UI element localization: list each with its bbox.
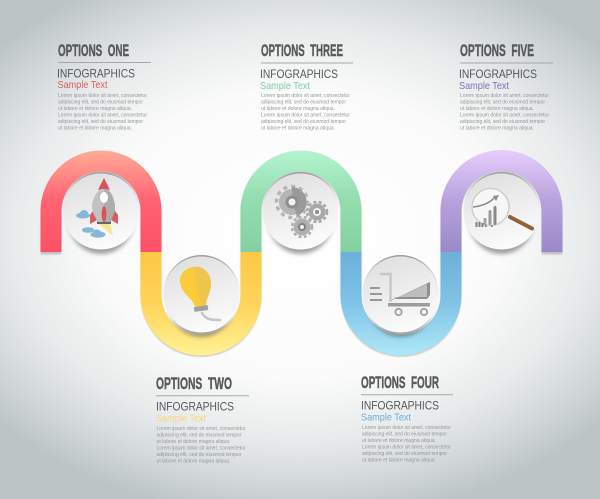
label: infographics: INFOGRAPHICS — [156, 400, 234, 414]
body copy — [156, 426, 246, 464]
body copy: ut labore et dolore magna aliqua. — [261, 126, 335, 132]
ribbon segment: green — [251, 161, 351, 252]
label: infographics: INFOGRAPHICS — [57, 66, 135, 80]
icon: rocket — [90, 178, 118, 236]
body copy: ut labore et dolore magna aliqua. — [460, 106, 534, 112]
icon: clouds — [76, 210, 106, 238]
ribbon segment: red — [51, 161, 151, 252]
label: infographics: INFOGRAPHICS — [260, 67, 338, 81]
heading: options one: OPTIONS ONE — [58, 41, 129, 60]
body copy — [261, 93, 350, 132]
text block: option two — [156, 374, 249, 464]
body copy: Lorem ipsum dolor sit amet, consectetur — [362, 444, 451, 450]
body copy: Lorem ipsum dolor sit amet, consectetur — [58, 112, 147, 118]
ribbon segment: blue — [351, 252, 451, 345]
step 4 disc with shopping cart icon — [362, 255, 438, 337]
body copy: Lorem ipsum dolor sit amet, consectetur — [58, 93, 147, 99]
label: infographics: INFOGRAPHICS — [459, 67, 537, 81]
step 5 disc with magnifier icon — [464, 172, 540, 254]
body copy: Lorem ipsum dolor sit amet, consectetur — [362, 425, 451, 431]
body copy: adipiscing elit, sed do eiusmod tempor — [156, 452, 242, 458]
body copy: adipiscing elit, sed do eiusmod tempor — [362, 431, 447, 437]
body copy: ut labore et dolore magna aliqua. — [362, 457, 436, 463]
label: infographics: INFOGRAPHICS — [361, 398, 439, 412]
body copy: adipiscing elit, sed do eiusmod tempor — [156, 432, 242, 438]
body copy: ut labore et dolore magna aliqua. — [261, 106, 335, 112]
body copy: Lorem ipsum dolor sit amet, consectetur — [261, 112, 350, 118]
body copy: adipiscing elit, sed do eiusmod tempor — [58, 119, 143, 125]
body copy — [460, 93, 549, 132]
heading: options five: OPTIONS FIVE — [460, 41, 534, 60]
step 3 disc with gears icon — [262, 172, 338, 254]
body copy: adipiscing elit, sed do eiusmod tempor — [261, 119, 346, 125]
text block: option three — [260, 41, 353, 132]
body copy — [362, 425, 451, 463]
label: sample text: Sample Text — [156, 412, 206, 424]
body copy: adipiscing elit, sed do eiusmod tempor — [362, 451, 447, 457]
body copy: ut labore et dolore magna aliqua. — [460, 126, 534, 132]
label: sample text: Sample Text — [58, 79, 108, 91]
body copy: adipiscing elit, sed do eiusmod tempor — [261, 100, 346, 106]
label: sample text: Sample Text — [361, 412, 411, 424]
body copy: ut labore et dolore magna aliqua. — [58, 125, 132, 131]
icon: gears — [276, 186, 327, 237]
body copy: Lorem ipsum dolor sit amet, consectetur — [460, 93, 549, 99]
body copy: Lorem ipsum dolor sit amet, consectetur — [460, 112, 549, 118]
heading: options three: OPTIONS THREE — [261, 41, 343, 60]
icon: magnifier with chart — [472, 188, 532, 228]
label: sample text: Sample Text — [260, 80, 310, 92]
body copy — [58, 93, 147, 131]
body copy: Lorem ipsum dolor sit amet, consectetur — [156, 445, 246, 451]
heading: options four: OPTIONS FOUR — [361, 373, 439, 392]
text block: option four — [361, 373, 453, 463]
icon: light bulb — [180, 267, 220, 320]
text block: option one — [57, 41, 151, 131]
ribbon: winding path — [51, 160, 552, 346]
body copy: ut labore et dolore magna aliqua. — [58, 106, 132, 112]
text block: option five — [459, 41, 553, 132]
heading: options two: OPTIONS TWO — [156, 374, 232, 393]
ribbon segment: purple — [451, 160, 552, 252]
body copy: adipiscing elit, sed do eiusmod tempor — [58, 99, 143, 105]
icon: shopping cart — [370, 274, 430, 315]
label: sample text: Sample Text — [459, 80, 509, 92]
body copy: adipiscing elit, sed do eiusmod tempor — [460, 100, 545, 106]
ribbon segment: yellow — [151, 252, 251, 345]
body copy: Lorem ipsum dolor sit amet, consectetur — [156, 426, 246, 432]
body copy: ut labore et dolore magna aliqua. — [156, 439, 230, 445]
body copy: adipiscing elit, sed do eiusmod tempor — [460, 119, 545, 125]
body copy: ut labore et dolore magna aliqua. — [156, 458, 230, 464]
ribbon shadow — [51, 162, 552, 346]
step 1 disc with rocket icon — [63, 172, 139, 254]
body copy: Lorem ipsum dolor sit amet, consectetur — [261, 93, 350, 99]
body copy: ut labore et dolore magna aliqua. — [362, 438, 436, 444]
step 2 disc with light bulb icon — [164, 255, 240, 337]
